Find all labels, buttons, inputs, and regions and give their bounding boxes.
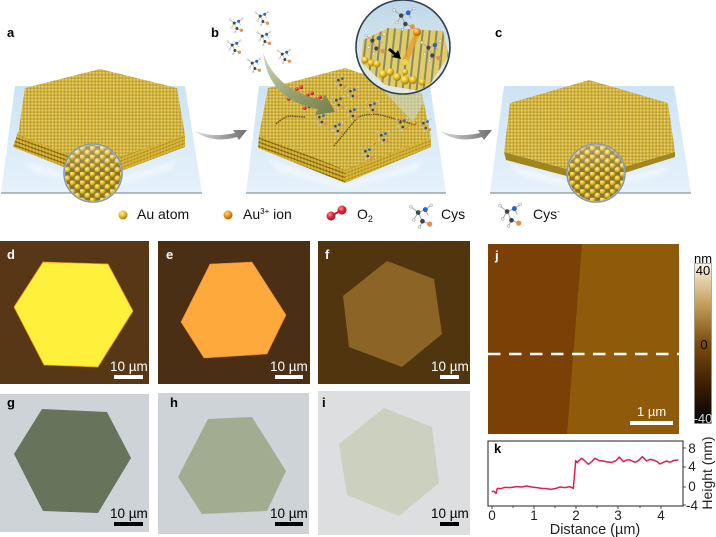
panel label: c: c xyxy=(495,25,502,40)
legend: Cys- xyxy=(498,203,560,228)
panel j: AFM height map: 1 µm xyxy=(637,404,666,419)
panel h: transmission light green: h xyxy=(170,395,178,410)
panel k: height profile chart: 4 xyxy=(657,508,665,523)
cys molecules on surface xyxy=(315,75,431,160)
panel d: optical dark-field yellow xyxy=(0,241,149,384)
panel k: height profile chart: 4 xyxy=(688,459,696,474)
panel i: transmission pale xyxy=(318,391,470,535)
legend: Au3+ ion: Au xyxy=(243,206,260,222)
panel b: etching on nanosheet xyxy=(227,0,450,193)
panel g: transmission dark green xyxy=(0,394,149,532)
magnifier: atoms c xyxy=(567,144,625,202)
panel i: transmission pale: 10 µm xyxy=(431,506,469,521)
panel j: AFM height map: j xyxy=(494,248,499,263)
arrow: a to b xyxy=(195,130,247,140)
legend: Cys-: Cys xyxy=(533,206,557,222)
legend: O2: O xyxy=(357,206,368,222)
legend: Au3+ ion xyxy=(224,206,292,222)
panel k: height profile chart: k xyxy=(494,441,502,456)
magnifier: atoms a xyxy=(64,144,122,202)
legend: Au3+ ion: 3+ xyxy=(260,207,270,216)
panel i: transmission pale: i xyxy=(322,395,326,410)
height trace xyxy=(492,457,678,493)
legend: Cys xyxy=(409,204,465,228)
magnifier cone xyxy=(378,85,433,122)
panel e: optical orange: 10 µm xyxy=(270,359,308,374)
legend: Au3+ ion: ion xyxy=(269,206,292,222)
panel label: b: b xyxy=(211,25,219,40)
colour scale bar: nm xyxy=(694,251,712,266)
panel k: height profile chart: 8 xyxy=(688,441,696,456)
panel j: AFM height map xyxy=(488,244,679,434)
au3+ ions along the trail xyxy=(372,120,416,144)
arrow: b to c xyxy=(440,130,492,140)
panel k: height profile chart: 0 xyxy=(688,479,696,494)
panel h: transmission light green xyxy=(158,393,309,534)
magnifier: etching site xyxy=(356,0,450,94)
colour scale bar xyxy=(694,251,712,426)
panel k: height profile chart: 1 xyxy=(530,508,538,523)
cys molecules in solution xyxy=(227,11,291,73)
panel k: height profile chart xyxy=(488,436,715,537)
panel k: height profile chart: -4 xyxy=(686,498,698,513)
panel k: height profile chart: 3 xyxy=(614,508,622,523)
o2 molecules on surface xyxy=(287,85,322,110)
legend: Cys-: - xyxy=(557,207,560,216)
arrow: molecules descend onto surface xyxy=(263,52,335,115)
legend xyxy=(118,203,560,228)
panel k: height profile chart: Height (nm) xyxy=(699,436,715,510)
axis ticks xyxy=(492,448,686,509)
panel e: optical orange xyxy=(158,241,310,384)
panel f: optical brown xyxy=(318,241,470,384)
panel g: transmission dark green: g xyxy=(7,395,15,410)
panel k: height profile chart: 2 xyxy=(572,508,580,523)
panel k: height profile chart: 0 xyxy=(488,508,496,523)
panel c: repaired nanosheet xyxy=(490,80,691,202)
colour scale bar: -40 xyxy=(694,411,712,426)
legend: Cys: Cys xyxy=(441,206,465,222)
colour scale bar: 0 xyxy=(700,337,708,352)
panel g: transmission dark green: 10 µm xyxy=(110,506,148,521)
panel e: optical orange: e xyxy=(166,247,173,262)
legend: O2 xyxy=(326,206,373,224)
panel label: a: a xyxy=(7,25,15,40)
panel f: optical brown: f xyxy=(325,247,330,262)
panel d: optical dark-field yellow: d xyxy=(7,247,15,262)
etched trails xyxy=(276,114,412,146)
panel a: gold nanosheet on substrate xyxy=(1,69,202,202)
panel f: optical brown: 10 µm xyxy=(431,359,469,374)
legend: O2: 2 xyxy=(368,214,373,224)
colour scale bar: 40 xyxy=(696,263,710,278)
panel h: transmission light green: 10 µm xyxy=(270,506,308,521)
panel d: optical dark-field yellow: 10 µm xyxy=(110,359,148,374)
legend: Au atom: Au atom xyxy=(137,206,189,222)
